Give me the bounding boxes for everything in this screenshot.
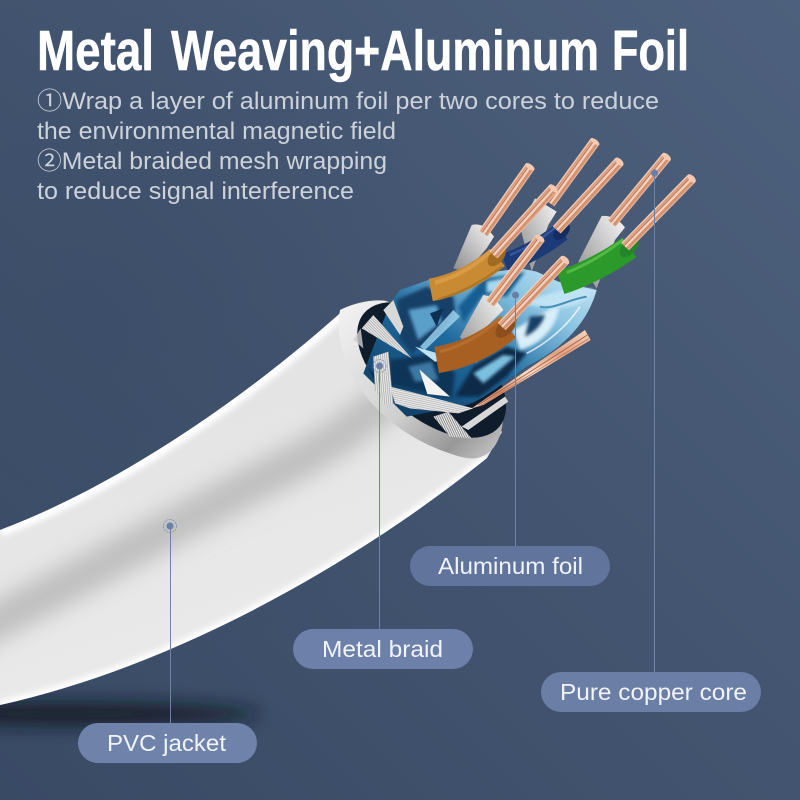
jacket flange: [339, 300, 503, 458]
green sheath: [561, 234, 642, 283]
leader: Pure copper core: [651, 170, 658, 672]
leader: Aluminum foil: [512, 292, 519, 546]
inner opening: [333, 276, 530, 464]
PVC jacket: [0, 314, 502, 705]
copper wire blue pair: [553, 156, 625, 234]
description text: ②Metal braided mesh wrapping: [37, 148, 387, 175]
description text: to reduce signal interference: [37, 178, 354, 205]
cable illustration: [0, 137, 697, 730]
copper wire orange: [489, 183, 559, 259]
label: Aluminum foil: Aluminum foil: [438, 553, 583, 579]
copper wire bundle lower: [472, 330, 591, 408]
title: Weaving+Aluminum: [171, 19, 599, 83]
leader: PVC jacket: [164, 520, 176, 723]
label: Pure copper core: Pure copper core: [560, 679, 747, 705]
center white core: [460, 295, 503, 363]
title: Metal: [37, 19, 154, 83]
label: Pure copper core: [541, 672, 761, 712]
label: PVC jacket: [78, 723, 257, 763]
white core top-left: [453, 224, 494, 272]
copper wire brown: [498, 254, 571, 330]
description text: [37, 88, 659, 205]
white core right: [578, 216, 625, 288]
description text: the environmental magnetic field: [37, 118, 396, 145]
description text: ①Wrap a layer of aluminum foil per two cores to reduce: [37, 88, 659, 115]
leader: Metal braid: [373, 360, 386, 629]
aluminum foil: [340, 268, 597, 417]
label: Metal braid: Metal braid: [322, 636, 443, 662]
cable shadow: [0, 703, 260, 725]
blue sheath: [505, 220, 573, 263]
cable head: [333, 137, 697, 464]
orange sheath: [431, 244, 509, 299]
back white core: [520, 198, 557, 272]
brown sheath: [437, 312, 520, 360]
label: Metal braid: [293, 629, 473, 669]
metal braid: [353, 300, 508, 438]
label: Aluminum foil: [410, 546, 610, 586]
title: Foil: [612, 19, 689, 83]
copper wire center: [486, 233, 546, 307]
copper wire right: [608, 151, 672, 227]
copper wire green: [621, 173, 697, 250]
copper wire back: [546, 137, 601, 206]
copper wire top-left: [479, 162, 536, 236]
label: PVC jacket: PVC jacket: [107, 730, 227, 756]
